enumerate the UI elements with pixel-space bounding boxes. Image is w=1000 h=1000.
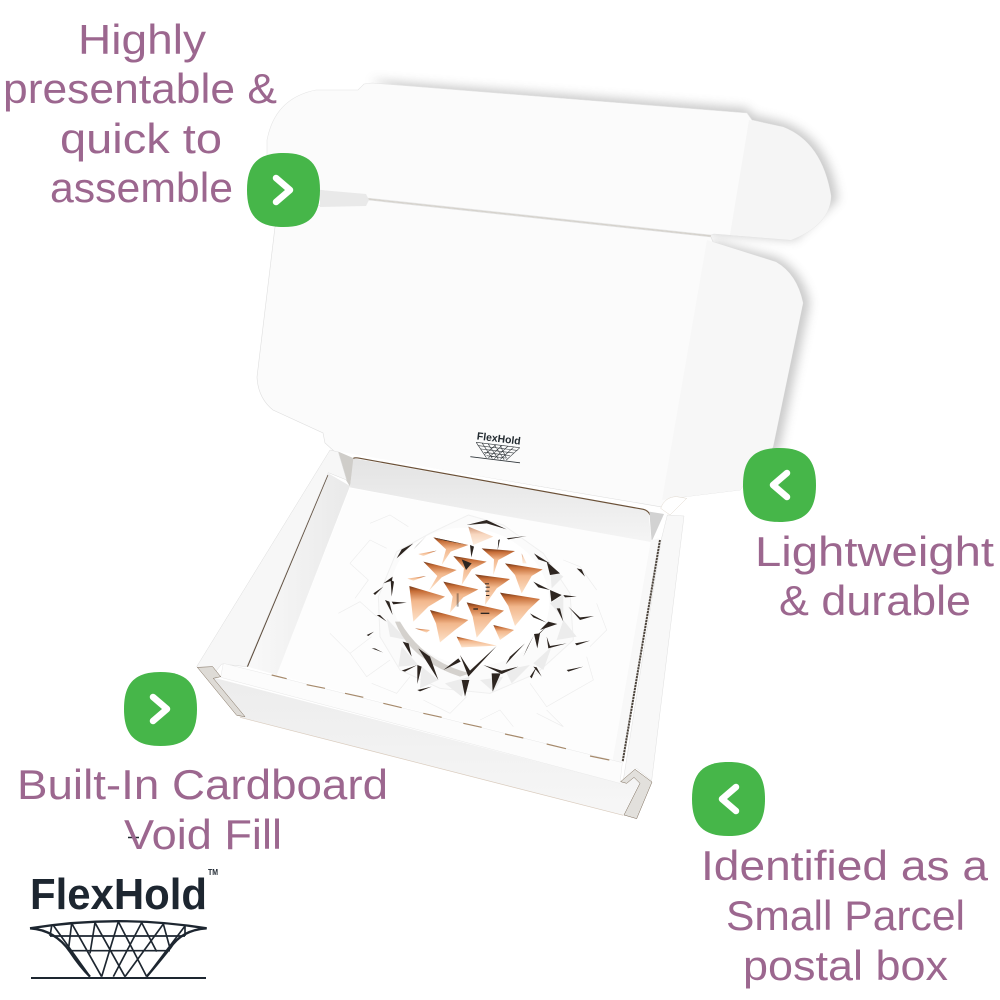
right lid panel shading [662, 240, 803, 500]
logo net structure [30, 921, 207, 977]
back wall top edge [353, 458, 650, 515]
heading: Built-In Cardboard Void Fill: Void Fill [124, 811, 282, 858]
left inner insert [247, 473, 350, 675]
front flap [221, 663, 622, 783]
heading: Lightweight and durable [755, 528, 994, 624]
heading: Identified as a Small Parcel postal box: Identified as a [701, 842, 989, 889]
logo trademark: TM [208, 868, 218, 877]
outer tile ring [378, 515, 573, 693]
lid fold line [368, 199, 711, 236]
cardboard box [197, 450, 687, 819]
right insert [613, 538, 659, 763]
perforation dashes [272, 675, 609, 760]
box lid [257, 80, 838, 507]
left wall [197, 450, 347, 677]
back right corner [649, 512, 664, 542]
back wall [350, 458, 652, 544]
dome [376, 511, 564, 682]
dark slits [367, 520, 594, 697]
right ear shading [730, 120, 831, 240]
icon: green left chevron badge lower right [692, 762, 765, 836]
right corrugated edge [623, 540, 660, 762]
small logo net [470, 442, 522, 463]
box base [197, 450, 683, 817]
heading: Highly presentable: Highly [78, 16, 206, 63]
heading: Built-In Cardboard Void Fill: Built-In Cardboard [17, 761, 388, 808]
orange cut-outs [407, 527, 543, 647]
left corrugated edge [247, 475, 328, 667]
heading: Lightweight and durable: & durable [779, 577, 971, 624]
hinge tab [661, 497, 687, 515]
heading: Highly presentable: quick to [60, 115, 222, 162]
printed marks [457, 559, 490, 614]
icon: green left chevron badge right [743, 448, 816, 522]
lid top flap [267, 83, 831, 240]
heading: Identified as a Small Parcel postal box: postal box [743, 942, 948, 989]
heading: Lightweight and durable: Lightweight [755, 528, 994, 575]
lid main panel [257, 200, 803, 507]
FlexHold logo [30, 868, 218, 978]
faint paper pattern [330, 515, 607, 727]
logo baseline [31, 977, 206, 979]
small logo wordmark: FlexHold [476, 430, 521, 448]
back left grey corner [338, 452, 354, 487]
front wall [213, 677, 652, 818]
icon: green right chevron badge top [247, 153, 320, 227]
left slot [320, 190, 369, 207]
heading: Highly presentable [3, 16, 277, 211]
front edge line [240, 717, 623, 815]
heading: Highly presentable: assemble [50, 164, 233, 211]
floor [277, 488, 658, 762]
left corner corrugation [197, 667, 245, 717]
heading: Identified as a Small Parcel postal box [701, 842, 989, 989]
FlexHold expanded void fill [330, 511, 607, 727]
dome lower shadow [395, 622, 470, 677]
small FlexHold logo on lid [470, 430, 523, 463]
icon: green right chevron badge lower left [124, 672, 197, 746]
heading: Built-In Cardboard Void Fill [17, 761, 388, 858]
right wall [623, 515, 684, 781]
heading: Identified as a Small Parcel postal box: Small Parcel [726, 892, 965, 939]
logo wordmark: FlexHold [30, 870, 207, 919]
right corner corrugation [621, 769, 652, 819]
heading: Highly presentable: presentable & [3, 65, 277, 112]
tile shading [387, 567, 577, 697]
